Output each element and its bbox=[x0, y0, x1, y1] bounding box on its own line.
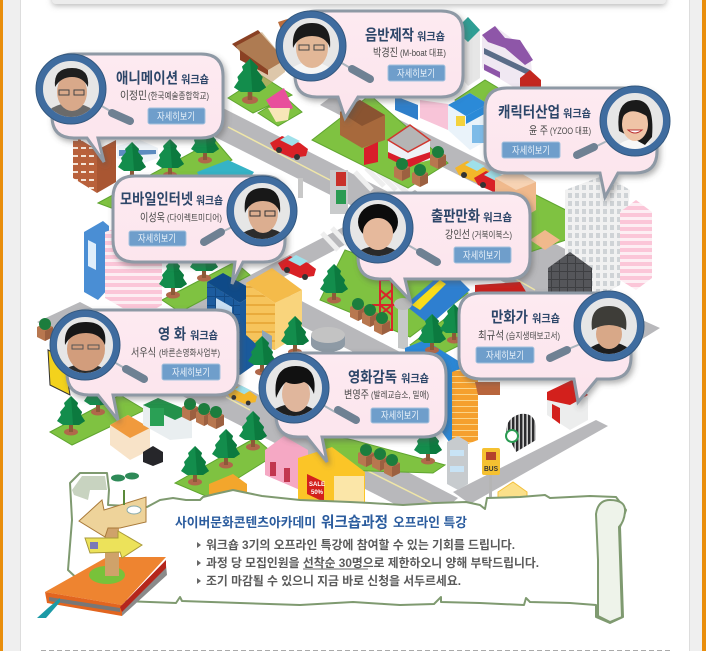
button bbox=[162, 364, 220, 380]
text: 워크숍 bbox=[401, 372, 429, 385]
icon: magnifier handle bbox=[577, 142, 605, 155]
brown houses bbox=[232, 15, 300, 90]
button bbox=[502, 142, 560, 158]
bus stop sign: BUS bbox=[484, 466, 498, 473]
portrait bbox=[574, 290, 644, 362]
portrait bbox=[258, 352, 330, 424]
callout: mobile internet workshop bbox=[113, 176, 297, 284]
button bbox=[476, 347, 534, 363]
text: 이정민 bbox=[120, 89, 147, 102]
banner heading: 워크숍과정 bbox=[321, 514, 388, 531]
text: 음반제작 bbox=[365, 27, 414, 44]
traffic lights bbox=[298, 170, 348, 214]
brick building bbox=[73, 135, 116, 193]
button: 자세히보기 bbox=[172, 367, 210, 379]
callout: film workshop bbox=[50, 310, 238, 420]
cars bbox=[227, 135, 512, 405]
teal and purple buildings bbox=[455, 17, 541, 90]
left towers bbox=[84, 221, 162, 318]
button bbox=[129, 231, 186, 246]
text: 워크숍 bbox=[181, 73, 209, 86]
button bbox=[148, 108, 205, 124]
text: 만화가 bbox=[491, 309, 528, 326]
portrait bbox=[50, 310, 120, 380]
sprout bbox=[111, 472, 139, 505]
callout: film director workshop bbox=[259, 353, 446, 462]
banner list: 과정 당 모집인원을 선착순 30명으로 제한하오니 양해 부탁드립니다. bbox=[206, 555, 539, 570]
callout: animation workshop bbox=[36, 54, 223, 162]
bus stop sign bbox=[482, 448, 500, 504]
banner heading: 사이버문화콘텐츠아카데미 bbox=[175, 515, 316, 530]
signpost bbox=[105, 520, 119, 576]
button: 자세히보기 bbox=[381, 410, 419, 422]
button: 자세히보기 bbox=[486, 350, 524, 362]
text: 워크숍 bbox=[190, 329, 218, 342]
text: (YZOO 대표) bbox=[550, 126, 591, 136]
text: (한국예술종합학교) bbox=[148, 91, 209, 101]
banner heading bbox=[175, 514, 467, 531]
text: (습지생태보고서) bbox=[506, 331, 560, 341]
text: 영 화 bbox=[158, 326, 186, 343]
scroll banner bbox=[68, 473, 626, 623]
text: 윤 주 bbox=[529, 124, 548, 137]
text bbox=[365, 27, 446, 59]
text: 워크숍 bbox=[532, 312, 560, 325]
text: 모바일인터넷 bbox=[120, 191, 193, 208]
portrait bbox=[36, 54, 106, 124]
text bbox=[478, 309, 560, 342]
road markings bbox=[226, 127, 535, 507]
banner list: 조기 마감될 수 있으니 지금 바로 신청을 서두르세요. bbox=[206, 573, 461, 588]
banner list bbox=[197, 537, 539, 588]
text: 워크숍 bbox=[417, 30, 445, 43]
portrait bbox=[276, 10, 346, 82]
icon: magnifier handle bbox=[550, 345, 578, 358]
text: 출판만화 bbox=[431, 208, 480, 225]
callout: cartoonist workshop bbox=[459, 291, 644, 402]
bottom shops: 50% bbox=[311, 490, 324, 496]
text: 이성욱 bbox=[140, 211, 165, 224]
callout: music workshop bbox=[276, 11, 463, 118]
white and pink towers bbox=[548, 175, 652, 296]
round gray building bbox=[311, 327, 345, 352]
portrait bbox=[342, 192, 414, 264]
text: 강인선 bbox=[445, 228, 470, 241]
right scroll roll bbox=[596, 500, 625, 622]
orange store bbox=[110, 415, 163, 466]
button bbox=[388, 65, 445, 81]
text: 캐릭터산업 bbox=[498, 104, 560, 121]
left scroll roll bbox=[72, 476, 107, 500]
red rooftop shop bbox=[475, 282, 528, 305]
text: (M-boat 대표) bbox=[400, 48, 446, 58]
tan building bbox=[495, 170, 560, 250]
pool bbox=[197, 160, 254, 178]
button: 자세히보기 bbox=[463, 250, 501, 262]
text bbox=[131, 326, 220, 359]
icon: magnifier handle bbox=[340, 62, 370, 79]
callout: character workshop bbox=[485, 86, 670, 197]
button: 자세히보기 bbox=[512, 145, 550, 157]
bottom dashed divider bbox=[41, 650, 670, 651]
button: 자세히보기 bbox=[157, 111, 195, 123]
blue and orange lower buildings bbox=[405, 340, 500, 490]
banner list: 워크숍 3기의 오프라인 특강에 참여할 수 있는 기회를 드립니다. bbox=[206, 537, 515, 552]
text: 변영주 bbox=[344, 388, 369, 401]
portrait bbox=[226, 176, 298, 246]
text: 워크숍 bbox=[483, 211, 512, 224]
green blocks bbox=[50, 76, 566, 497]
black arch bbox=[506, 414, 536, 452]
text: (발레교습소, 밀애) bbox=[371, 389, 429, 400]
text bbox=[498, 104, 591, 137]
button bbox=[371, 408, 429, 423]
button: 자세히보기 bbox=[397, 68, 435, 80]
book with signpost bbox=[37, 472, 167, 618]
sign arrow right bbox=[85, 531, 142, 558]
bottom shops bbox=[209, 436, 365, 506]
icon: magnifier handle bbox=[100, 105, 130, 121]
text: 애니메이션 bbox=[116, 70, 178, 87]
text bbox=[120, 191, 223, 224]
text bbox=[431, 208, 512, 241]
text bbox=[116, 70, 209, 102]
portrait bbox=[600, 86, 670, 156]
icon: magnifier handle bbox=[114, 362, 144, 379]
navy tower bbox=[207, 273, 257, 375]
central buildings bbox=[340, 100, 430, 168]
red shop bbox=[547, 380, 588, 430]
bottom shops: SALE bbox=[309, 482, 325, 488]
text: 서우식 bbox=[131, 346, 156, 359]
text: 박경진 bbox=[373, 46, 398, 59]
button bbox=[454, 247, 511, 263]
isometric city map bbox=[37, 15, 660, 522]
book bbox=[37, 557, 167, 618]
green cross building bbox=[143, 398, 192, 440]
white and blue low building bbox=[117, 140, 158, 166]
roads bbox=[37, 90, 660, 522]
text: 워크숍 bbox=[196, 194, 223, 207]
pink house bbox=[266, 88, 293, 122]
banner heading: 오프라인 특강 bbox=[393, 515, 467, 530]
icon: magnifier handle bbox=[408, 245, 437, 262]
text bbox=[344, 369, 429, 401]
crane and slide bbox=[372, 275, 470, 350]
callout: publishing comics workshop bbox=[343, 193, 530, 300]
text: 최규석 bbox=[478, 329, 504, 342]
icon: magnifier handle bbox=[204, 227, 232, 242]
button: 자세히보기 bbox=[138, 233, 176, 245]
sign arrow left bbox=[79, 497, 146, 537]
top panel edge bbox=[52, 0, 666, 4]
left yellow building bbox=[48, 350, 70, 395]
text: (바른손영화사업부) bbox=[159, 348, 220, 358]
text: 영화감독 bbox=[348, 369, 397, 386]
shop row bbox=[395, 93, 488, 150]
yellow building bbox=[246, 268, 302, 350]
text: 워크숍 bbox=[563, 107, 591, 120]
text: (다이렉트미디어) bbox=[167, 213, 222, 223]
text: (거북이북스) bbox=[472, 230, 512, 240]
yellow pentagon roof bbox=[498, 482, 527, 500]
trees bbox=[57, 59, 468, 485]
icon: magnifier handle bbox=[323, 405, 356, 420]
planters bbox=[37, 146, 446, 477]
